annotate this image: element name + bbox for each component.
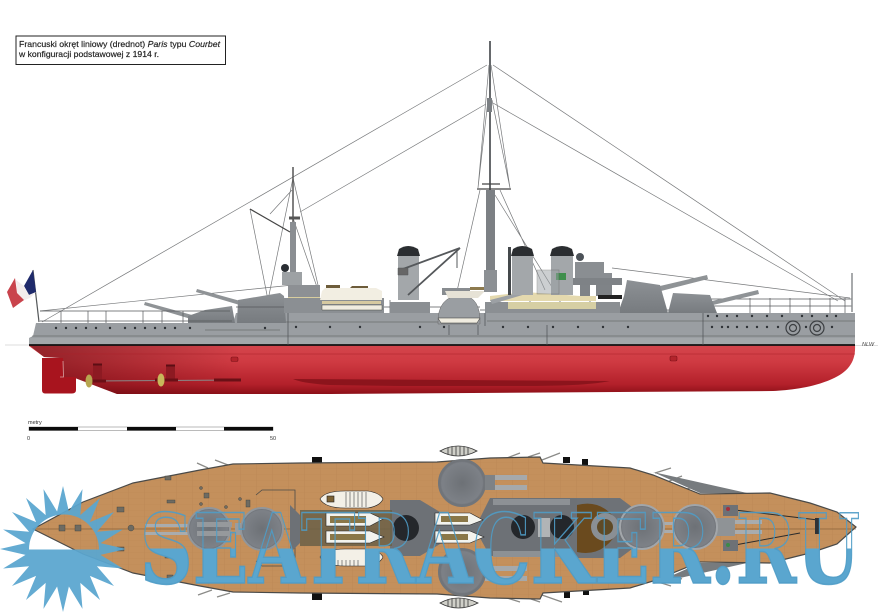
fore mast [250, 167, 320, 297]
boats on deck [320, 491, 484, 566]
anchors [786, 321, 824, 335]
turret: stern outer [145, 508, 232, 550]
turret: bow inner [620, 505, 710, 549]
deck railing [40, 298, 852, 323]
black boat booms [312, 457, 589, 600]
turret: starboard wing [439, 549, 527, 595]
deck centreline [33, 528, 856, 530]
superstructure [284, 285, 620, 324]
caption text line 1: Francuski okręt liniowy (drednot) Paris typu Courbet [19, 39, 221, 49]
scale bar [27, 420, 276, 442]
funnels [397, 246, 574, 300]
bow fittings [723, 505, 820, 551]
scale end: 50 [270, 436, 276, 442]
crane [398, 248, 460, 295]
caption text line 2: w konfiguracji podstawowej z 1914 r. [18, 49, 159, 59]
turret: port wing [439, 460, 527, 506]
rigging wires [40, 65, 850, 322]
NLW label: NLW [862, 342, 875, 348]
stern deck fittings [59, 476, 250, 579]
bow jackstaff [851, 273, 853, 312]
portholes [55, 315, 837, 329]
propeller shafts and propellers [86, 364, 241, 388]
ship top view [33, 446, 856, 608]
top boat [440, 446, 477, 456]
red lower hull and rudder [29, 345, 855, 394]
bottom boat [440, 598, 478, 608]
wooden deck hull [33, 457, 856, 599]
funnels seen from above [393, 515, 574, 541]
forward guns and turrets [618, 275, 759, 313]
grey upper hull [29, 313, 855, 345]
waterline markers [5, 344, 878, 346]
stern guns and turrets [144, 289, 286, 323]
flag [7, 270, 39, 322]
turret: stern inner [235, 508, 283, 550]
grey forward wing decks [653, 472, 747, 584]
turret: bow outer [673, 505, 762, 549]
caption box [16, 36, 226, 64]
bridge and forward superstructure [508, 253, 622, 309]
scale label metry: metry [28, 420, 42, 426]
main mast [477, 41, 511, 292]
ship side view [5, 41, 878, 394]
central grey superstructure [256, 490, 636, 566]
outboard spars [197, 453, 693, 602]
watermark sunburst logo [0, 486, 126, 612]
scale start: 0 [27, 436, 30, 442]
